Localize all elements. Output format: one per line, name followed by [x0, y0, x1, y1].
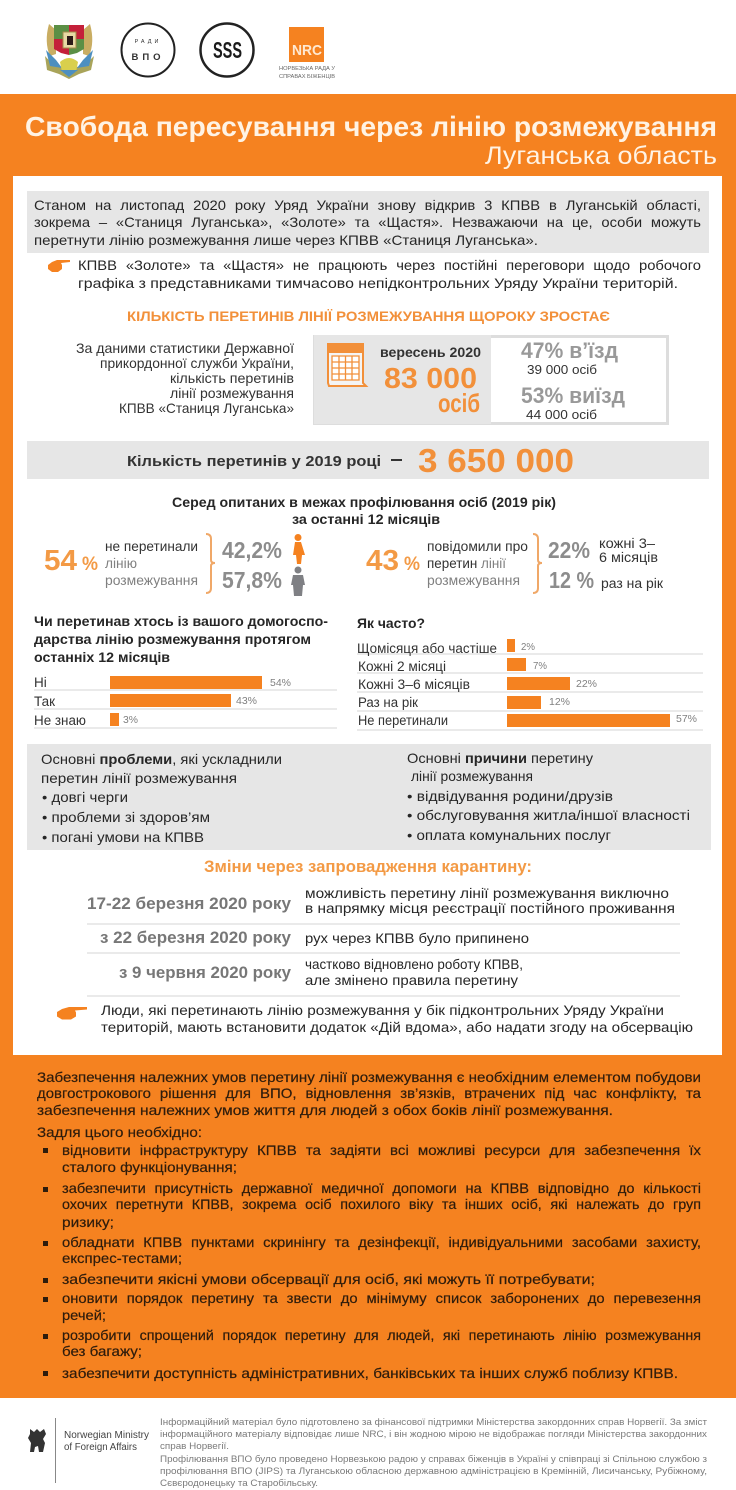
logo: SSS: SSS	[213, 37, 242, 63]
timeline table: 17-22 березня 2020 року	[87, 894, 292, 913]
logo: SSS	[200, 24, 254, 76]
stat: 54% did not cross: %	[82, 554, 98, 575]
panel: September 2020 stats: 47% в’їзд	[521, 338, 618, 363]
stat: 43% crossed: раз на рік	[601, 576, 663, 591]
statistics source text: лінії розмежування	[170, 385, 294, 401]
brace	[533, 534, 542, 593]
stat: 54% did not cross: 57,8%	[222, 567, 282, 593]
white main panel	[13, 176, 722, 1055]
conclusion text: Забезпечення належних умов перетину лінії розмежування є необхідним елементом побудови	[37, 1069, 701, 1085]
problems list	[41, 751, 282, 845]
recommendations list: охочих перетнути КПВВ, зокрема осіб похилого віку та інших осіб, які належать до груп	[62, 1196, 701, 1212]
stat: 54% did not cross: лінію	[105, 556, 137, 571]
conclusion text: Задля цього необхідно:	[37, 1124, 202, 1140]
bar chart: how often: 12%	[549, 696, 570, 708]
conclusion text: довгострокового рішення для ВПО, відновлення зв’язків, втрачених під час конфлікту, та	[37, 1085, 701, 1101]
timeline table	[87, 885, 680, 996]
chart heading: останніх 12 місяців	[34, 649, 170, 665]
recommendations list: забезпечити доступність адміністративних, банківських та інших служб поблизу КПВВ.	[62, 1365, 678, 1381]
footer: disclaimer text: профілювання ВПО (JIPS) та Луганською обласною державною адміністрацією в Кремінній, Лисичанську, Рубіжному,	[160, 1466, 707, 1477]
bar chart: how often: Кожні 2 місяці	[358, 659, 446, 674]
bar chart: how often: Раз на рік	[358, 695, 418, 710]
recommendations list: забезпечити присутність державної медичної допомоги на КПВВ відповідно до кількості	[62, 1180, 701, 1196]
logo: Rady VPO: ВПО	[131, 52, 165, 63]
stat: 54% did not cross: розмежування	[105, 573, 198, 588]
footer: disclaimer text: Профілювання ВПО було проведено Норвезькою радою у справах біженців в Україні у співпраці зі Спільною службою з	[160, 1454, 707, 1465]
timeline table: з 22 березня 2020 року	[100, 928, 292, 947]
panel: 2019 total crossings	[27, 441, 709, 479]
icon: woman	[293, 534, 305, 564]
chart heading	[34, 613, 328, 665]
panel: 2019 total crossings: 3 650 000	[418, 442, 574, 479]
problems list: • погані умови на КПВВ	[42, 829, 204, 845]
heading: quarantine changes: Зміни через запровадження карантину:	[204, 858, 532, 876]
recommendations list: забезпечити якісні умови обсервації для осіб, які можуть її потребувати;	[62, 1271, 595, 1287]
recommendations list: ризику;	[62, 1214, 114, 1230]
heading: survey: Серед опитаних в межах профілювання осіб (2019 рік)	[172, 494, 556, 510]
bar chart: how often	[357, 615, 703, 730]
footer: disclaimer text	[160, 1417, 708, 1489]
note: Dii vdoma app: Люди, які перетинають лінію розмежування у бік підконтрольних Уряду України	[101, 1002, 664, 1018]
reasons list: • оплата комунальних послуг	[407, 827, 611, 843]
stat: 54% did not cross: 42,2%	[222, 537, 282, 563]
bar chart: how often: Кожні 3–6 місяців	[358, 677, 470, 692]
statistics source text: За даними статистики Державної	[76, 340, 294, 356]
recommendations list: розробити спрощений порядок перетину для людей, які перетинають лінію розмежування	[62, 1327, 701, 1343]
note: Dii vdoma app	[101, 1002, 693, 1035]
intro text block: зокрема – «Станиця Луганська», «Золоте» та «Щастя». Незважаючи на це, особи можуть	[34, 214, 701, 230]
chart heading: Як часто?	[357, 615, 425, 631]
stat: 43% crossed: кожні 3–	[599, 536, 656, 551]
bar chart: how often: Не перетинали	[358, 713, 448, 728]
recommendations list: відновити інфраструктуру КПВВ та задіяти всі можливі ресурси для забезпечення їх	[62, 1142, 701, 1158]
reasons list: Основні причини перетину	[407, 750, 593, 766]
timeline table: з 9 червня 2020 року	[119, 963, 292, 982]
icon: pointing hand	[48, 260, 70, 272]
title: Свобода пересування через лінію розмежування	[25, 111, 717, 142]
reasons list	[407, 750, 690, 843]
conclusion text: забезпечення належних умов життя для людей з обох боків лінії розмежування.	[37, 1102, 613, 1118]
footer: disclaimer text: інформаційного матеріалу відповідає лише NRC, і він жодною мірою не відображає погляди Міністерства закордонних	[160, 1429, 707, 1440]
icon: Norwegian lion	[28, 1429, 46, 1452]
brace	[206, 534, 215, 593]
bar chart: household crossings: Так	[34, 694, 55, 709]
panel: September 2020 stats: 53% виїзд	[521, 383, 625, 408]
recommendations list: речей;	[62, 1307, 106, 1323]
bar chart: how often: 2%	[521, 641, 535, 653]
stat: 54% did not cross: 54	[44, 545, 77, 577]
footer: disclaimer text: Інформаційний матеріал було підготовлено за фінансової підтримки Міністерства закордонних справ Норвегії. За зміст	[160, 1417, 708, 1428]
bar chart: how often: 22%	[576, 678, 597, 690]
icon: pointing hand	[57, 1007, 87, 1020]
intro text block	[27, 191, 709, 253]
statistics source text: прикордонної служби України,	[100, 355, 294, 371]
reasons list: • відвідування родини/друзів	[407, 788, 613, 804]
stat: 43% crossed	[366, 534, 663, 593]
logo: Rady VPO: РАДИ	[135, 39, 161, 45]
timeline table: частково відновлено роботу КПВВ,	[305, 956, 523, 972]
problems list: • довгі черги	[42, 789, 128, 805]
note: closed crossings	[78, 257, 701, 291]
panel: September 2020 stats: 39 000 осіб	[527, 362, 597, 377]
problems list: Основні проблеми , які ускладнили	[41, 751, 282, 767]
stat: 43% crossed: %	[404, 554, 420, 575]
logo: Luhansk coat of arms	[45, 24, 94, 79]
statistics source text: КПВВ «Станиця Луганська»	[119, 400, 294, 416]
heading: survey: за останні 12 місяців	[292, 511, 440, 527]
footer: Norwegian Ministry logo: Norwegian Ministry	[64, 1430, 149, 1441]
stat: 43% crossed: розмежування	[427, 573, 520, 588]
chart heading: Чи перетинав хтось із вашого домогоспо-	[34, 613, 328, 629]
bar chart: household crossings: 54%	[270, 677, 291, 689]
heading: survey	[172, 494, 556, 527]
stat: 43% crossed: 12 %	[549, 567, 594, 593]
panel: September 2020 stats: 44 000 осіб	[526, 407, 597, 422]
statistics source text	[76, 340, 294, 416]
recommendations list: без багажу;	[62, 1343, 142, 1359]
footer: disclaimer text: справ Норвегії.	[160, 1441, 229, 1452]
panel: September 2020 stats: 83 000	[384, 363, 477, 395]
logo: NRC: НОРВЕЗЬКА РАДА У	[279, 66, 336, 72]
note: closed crossings: КПВВ «Золоте» та «Щастя» не працюють через постійні переговори щодо робочого	[78, 257, 701, 273]
footer: disclaimer text: Сєвєродонецьку та Старобільську.	[160, 1478, 318, 1489]
bar chart: household crossings: 43%	[236, 695, 257, 707]
stat: 43% crossed: 43	[366, 545, 399, 577]
timeline table: рух через КПВВ було припинено	[305, 930, 529, 946]
stat: 54% did not cross: не перетинали	[105, 539, 198, 554]
timeline table: але змінено правила перетину	[305, 972, 518, 988]
logos row	[45, 24, 336, 80]
logo: Rady VPO	[122, 24, 174, 76]
panel: September 2020 stats	[314, 335, 668, 424]
recommendations list	[43, 1142, 701, 1381]
icon: man	[291, 566, 305, 596]
bar chart: how often: 7%	[533, 660, 547, 672]
note: Dii vdoma app: територій, мають встановити додаток «Дій вдома», або надати згоду на обсервацію	[101, 1019, 693, 1035]
timeline table: в напрямку місця реєстрації постійного проживання	[305, 900, 675, 916]
note: closed crossings: графіка з представниками тимчасово непідконтрольних Уряду України територій.	[78, 275, 678, 291]
conclusion text	[37, 1069, 701, 1140]
title	[25, 111, 717, 170]
bar chart: household crossings	[34, 613, 337, 728]
heading: crossings grow: КІЛЬКІСТЬ ПЕРЕТИНІВ ЛІНІЇ РОЗМЕЖУВАННЯ ЩОРОКУ ЗРОСТАЄ	[127, 308, 610, 324]
panel: September 2020 stats: осіб	[438, 388, 480, 418]
panel: 2019 total crossings: Кількість перетинів у 2019 році	[127, 454, 381, 470]
stat: 43% crossed: 22%	[548, 537, 590, 563]
stat: 43% crossed: повідомили про	[427, 539, 528, 554]
recommendations list: оновити порядок перетину та звести до мінімуму список заборонених до перевезення	[62, 1290, 701, 1306]
panel: September 2020 stats: вересень 2020	[380, 344, 481, 360]
stat: 54% did not cross	[44, 534, 305, 596]
bar chart: household crossings: Не знаю	[34, 713, 86, 728]
logo: NRC: NRC	[292, 42, 322, 59]
reasons list: • обслуговування житла/іншої власності	[407, 807, 690, 823]
bar chart: how often: Щомісяця або частіше	[357, 641, 497, 656]
problems list: перетин лінії розмежування	[41, 770, 237, 786]
recommendations list: експрес-тестами;	[62, 1250, 182, 1266]
stat: 43% crossed: перетин лінії	[427, 556, 506, 571]
timeline table: можливість перетину лінії розмежування виключно	[305, 885, 669, 901]
footer: Norwegian Ministry logo: of Foreign Affairs	[64, 1442, 137, 1453]
recommendations list: обладнати КПВВ пунктами скринінгу та дезінфекції, індивідуальними засобами захисту,	[62, 1234, 701, 1250]
recommendations list: сталого функціонування;	[62, 1159, 237, 1175]
intro text block: перетнути лінію розмежування лише через КПВВ «Станиця Луганська».	[34, 232, 538, 248]
footer: Norwegian Ministry logo	[28, 1418, 149, 1483]
bar chart: household crossings: 3%	[123, 714, 138, 726]
stat: 43% crossed: 6 місяців	[599, 550, 658, 565]
statistics source text: кількість перетинів	[170, 370, 294, 386]
bar chart: household crossings: Ні	[34, 675, 47, 690]
logo: NRC	[279, 27, 336, 80]
reasons list: лінії розмежування	[411, 768, 533, 784]
bar chart: how often: 57%	[676, 713, 697, 725]
problems list: • проблеми зі здоров’ям	[42, 809, 210, 825]
icon: calendar	[327, 343, 366, 386]
panel: problems and reasons	[27, 744, 711, 850]
chart heading: дарства лінію розмежування протягом	[34, 631, 311, 647]
logo: NRC: СПРАВАХ БІЖЕНЦІВ	[279, 74, 335, 80]
intro text block: Станом на листопад 2020 року Уряд України знову відкрив 3 КПВВ в Луганській області,	[34, 197, 701, 213]
subtitle: Луганська область	[485, 142, 717, 170]
